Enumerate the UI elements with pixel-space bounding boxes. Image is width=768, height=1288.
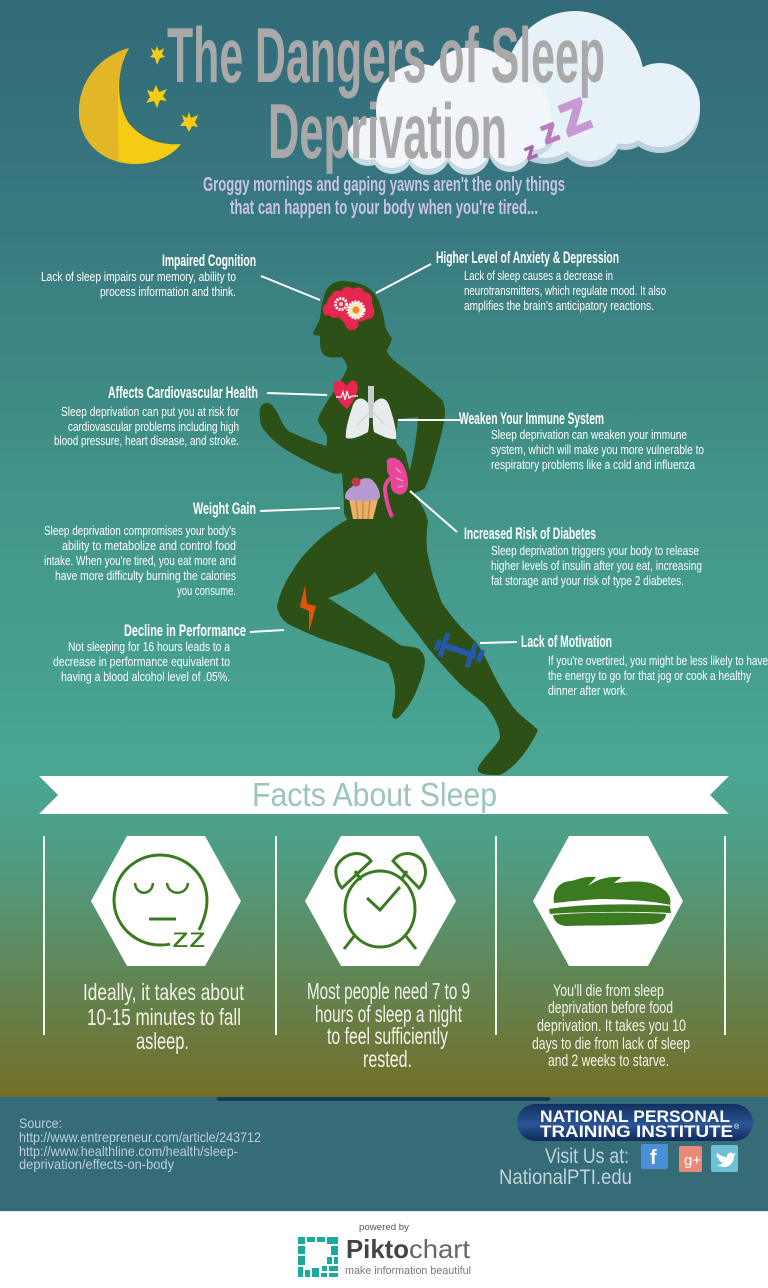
- fact 3 text: [532, 981, 690, 1070]
- white attribution area: [0, 1211, 768, 1288]
- title: [167, 11, 605, 175]
- banner: facts about sleep: [39, 776, 729, 814]
- callout: weight gain: ability to metabolize and control food: [62, 538, 236, 553]
- icon: facebook: [641, 1144, 668, 1169]
- callout: cardiovascular health: Sleep deprivation can put you at risk for: [61, 404, 240, 419]
- banner: facts about sleep: Facts About Sleep: [252, 776, 497, 813]
- sources: http://www.entrepreneur.com/article/243712: [19, 1129, 261, 1145]
- callout: immune system: Weaken Your Immune System: [459, 409, 604, 428]
- callout: immune system: Sleep deprivation can weaken your immune: [491, 427, 687, 442]
- sources: Source:: [19, 1115, 62, 1131]
- subtitle: [203, 174, 565, 219]
- fact 2 text: Most people need 7 to 9: [307, 978, 470, 1004]
- callout: weight gain: have more difficulty burning the calories: [55, 568, 236, 583]
- figure: runner silhouette: [260, 281, 538, 775]
- footer band: [0, 1097, 768, 1211]
- visit us text: NationalPTI.edu: [499, 1166, 632, 1189]
- logo: national personal training institute: ®: [734, 1123, 740, 1131]
- fact 1 text: 10-15 minutes to fall: [87, 1004, 241, 1030]
- callout: diabetes: Increased Risk of Diabetes: [464, 524, 596, 543]
- fact 1 icon: sleeping face: zz: [172, 922, 206, 953]
- column dividers: [44, 836, 725, 1035]
- visit us text: Visit Us at:: [545, 1145, 629, 1168]
- fact 2 text: [307, 978, 470, 1072]
- callout: impaired cognition: process information and think.: [100, 284, 236, 299]
- sources: http://www.healthline.com/health/sleep-: [19, 1143, 238, 1159]
- subtitle: that can happen to your body when you're tired...: [230, 197, 538, 219]
- icon: zzz: Z: [553, 90, 597, 145]
- fact 1 text: Ideally, it takes about: [83, 979, 244, 1005]
- logo: national personal training institute: TRAINING INSTITUTE: [540, 1122, 733, 1141]
- fact 3 text: days to die from lack of sleep: [532, 1034, 690, 1053]
- icon: brain with gears: [323, 287, 374, 330]
- callout: cardiovascular health: blood pressure, heart disease, and stroke.: [54, 433, 239, 448]
- callout: weight gain: intake. When you're tired, you eat more and: [44, 553, 236, 568]
- fact 1 icon: sleeping face: [91, 836, 241, 966]
- callout: impaired cognition: Lack of sleep impairs our memory, ability to: [41, 269, 236, 284]
- fact 3 text: deprivation. It takes you 10: [537, 1016, 686, 1035]
- callout: cardiovascular health: [54, 383, 258, 448]
- title: Deprivation: [268, 87, 507, 175]
- fact 2 icon: alarm clock: [305, 836, 456, 966]
- fact 3 text: and 2 weeks to starve.: [548, 1051, 669, 1070]
- icon: stars: [146, 46, 198, 132]
- logo: piktochart: [298, 1234, 471, 1277]
- powered by: powered by: [359, 1222, 410, 1232]
- fact 1 text: [83, 979, 244, 1054]
- callout: diabetes: fat storage and your risk of type 2 diabetes.: [491, 573, 684, 588]
- callout: diabetes: Sleep deprivation triggers your body to release: [491, 543, 699, 558]
- sources: [19, 1115, 261, 1172]
- callout: anxiety and depression: Higher Level of Anxiety & Depression: [436, 248, 619, 267]
- icon: facebook: f: [650, 1147, 657, 1169]
- icon: moon: [79, 48, 181, 164]
- callout: lack of motivation: Lack of Motivation: [521, 632, 612, 651]
- icon: zzz: Z: [538, 118, 562, 150]
- callout: cardiovascular health: Affects Cardiovascular Health: [108, 383, 258, 402]
- fact 3 icon: sandwich: [533, 836, 683, 966]
- icon: dumbbell: [436, 633, 483, 667]
- sources: deprivation/effects-on-body: [19, 1156, 174, 1172]
- callout: decline in performance: Not sleeping for 16 hours leads to a: [68, 639, 231, 654]
- visit us text: [499, 1145, 632, 1189]
- callout: decline in performance: decrease in performance equivalent to: [53, 654, 230, 669]
- logo: piktochart: chart: [409, 1234, 471, 1264]
- fact 1 text: asleep.: [136, 1028, 189, 1054]
- callout: anxiety and depression: neurotransmitters, which regulate mood. It also: [464, 283, 666, 298]
- callout: weight gain: Weight Gain: [193, 499, 256, 518]
- logo: national personal training institute: NATIONAL PERSONAL: [540, 1107, 730, 1126]
- footer top strip: [217, 1097, 550, 1101]
- icon: zzz: Z: [522, 142, 539, 164]
- callout: diabetes: higher levels of insulin after you eat, increasing: [491, 558, 702, 573]
- logo: national personal training institute: [517, 1104, 753, 1141]
- callout: impaired cognition: Impaired Cognition: [162, 251, 256, 270]
- callout: immune system: respiratory problems like a cold and influenza: [491, 457, 696, 472]
- callout: immune system: system, which will make you more vulnerable to: [491, 442, 704, 457]
- icon: heart: [333, 381, 358, 409]
- icon: zzz: [522, 90, 597, 164]
- subtitle: Groggy mornings and gaping yawns aren't the only things: [203, 174, 565, 196]
- logo: piktochart: Pikto: [346, 1234, 409, 1264]
- callout: cardiovascular health: cardiovascular problems including high: [68, 419, 239, 434]
- icon: cupcake: [345, 478, 380, 519]
- icon: front cloud: [347, 47, 555, 175]
- icon: kidney: [385, 458, 408, 517]
- callout: immune system: [459, 409, 704, 472]
- callout: decline in performance: Decline in Performance: [124, 621, 246, 640]
- callout: impaired cognition: [41, 251, 256, 299]
- fact 2 text: to feel sufficiently: [327, 1023, 448, 1049]
- fact 3 text: deprivation before food: [548, 998, 673, 1017]
- callout: diabetes: [464, 524, 702, 588]
- icon: google plus: [679, 1146, 702, 1172]
- callout: lack of motivation: dinner after work.: [548, 683, 628, 698]
- callout: weight gain: Sleep deprivation compromises your body's: [44, 523, 236, 538]
- icon: lungs: [346, 386, 396, 439]
- callout: anxiety and depression: [436, 248, 666, 313]
- icon: lightning bolt: [300, 585, 316, 632]
- callout: weight gain: you consume.: [177, 583, 236, 598]
- fact 2 text: hours of sleep a night: [315, 1001, 462, 1027]
- callout: anxiety and depression: Lack of sleep causes a decrease in: [464, 268, 613, 283]
- icon: back cloud: [506, 11, 700, 167]
- icon: google plus: g+: [684, 1152, 701, 1169]
- callout: anxiety and depression: amplifies the brain's anticipatory reactions.: [464, 298, 654, 313]
- callout: decline in performance: having a blood alcohol level of .05%.: [61, 669, 230, 684]
- pointer lines: [250, 264, 517, 643]
- fact 3 text: You'll die from sleep: [553, 981, 664, 1000]
- fact 2 text: rested.: [363, 1046, 412, 1072]
- callout: lack of motivation: [521, 632, 768, 698]
- logo: piktochart: make information beautiful: [345, 1265, 471, 1277]
- icon: twitter: [711, 1145, 738, 1172]
- callout: weight gain: [44, 499, 256, 598]
- callout: decline in performance: [53, 621, 246, 684]
